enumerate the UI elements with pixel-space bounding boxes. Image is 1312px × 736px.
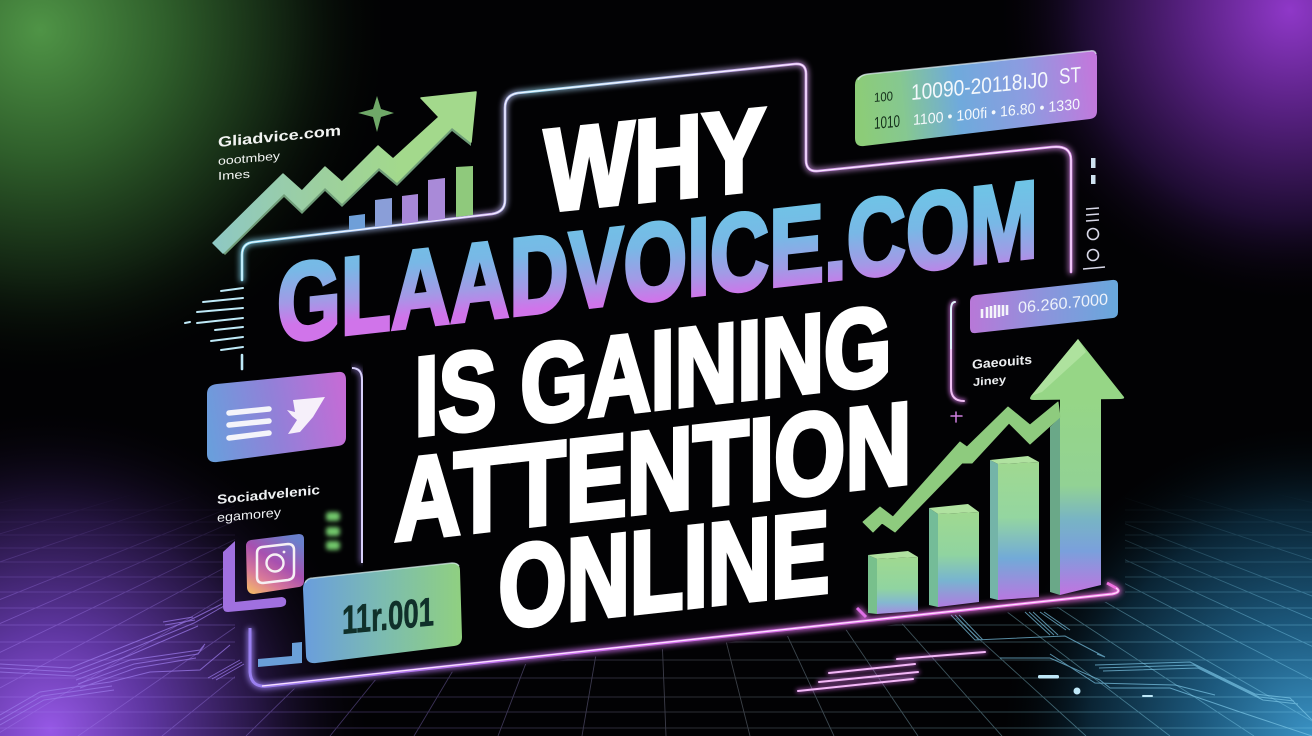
mini bars in pill (982, 305, 1007, 318)
social label: Sociadvelenic (217, 482, 320, 507)
pill value: 06.260.7000 (1018, 290, 1108, 317)
small blue dashes on the floor (1038, 675, 1153, 697)
circuit traces left (0, 604, 244, 725)
right chart label (972, 352, 1032, 389)
banner values: ST (1059, 62, 1081, 89)
pink dashes on the floor (798, 652, 985, 691)
top left label: Gliadvice.com (218, 123, 341, 151)
small bar chart top left (349, 166, 473, 230)
neon bracket right (951, 302, 964, 422)
zigzag trend line (863, 402, 1060, 532)
right chart label: Jiney (973, 374, 1007, 389)
data banner top right (855, 51, 1097, 146)
top left label: oootmbey (218, 151, 280, 168)
bar 1 (868, 551, 918, 614)
circuit traces right (951, 612, 1312, 736)
icon: bird (287, 397, 325, 434)
title line: ATTENTION: ATTENTION (394, 378, 912, 565)
bar 2 (929, 504, 979, 607)
icon: instagram (246, 534, 304, 594)
right chart label: Gaeouits (972, 352, 1032, 372)
neon frame left ticks (185, 288, 243, 369)
top left label (218, 123, 341, 183)
side indicators right (1083, 158, 1105, 269)
neon frame bottom line (250, 583, 1118, 686)
3D bar chart with arrow (863, 339, 1124, 614)
growth arrow bar (1030, 339, 1124, 595)
icon: list lines (229, 409, 269, 438)
top left label: Imes (218, 169, 250, 183)
data pill middle right (970, 280, 1118, 333)
banner row labels (874, 88, 900, 133)
title line: ONLINE: ONLINE (498, 487, 830, 653)
icon: sparkle star (358, 96, 394, 132)
neon frame left inner segment (352, 368, 362, 563)
social label (217, 482, 320, 525)
pill number text: 11r.001 (342, 590, 434, 643)
banner values (911, 62, 1081, 129)
green status dots (326, 512, 340, 550)
blue step mark (258, 642, 302, 667)
title line: IS GAINING: IS GAINING (414, 282, 892, 459)
social label: egamorey (217, 505, 282, 525)
banner row labels: 1010 (874, 112, 900, 133)
number pill (303, 563, 462, 663)
perspective floor grid (0, 503, 1312, 736)
title line: WHY: WHY (544, 84, 766, 236)
icon: bracket (223, 541, 286, 612)
banner values: 10090-20118ıJ0 (911, 67, 1048, 105)
social pill with list and bird icon (207, 372, 346, 462)
bar 3 (990, 456, 1039, 600)
title line: GLAADVOICE.COM: GLAADVOICE.COM (277, 158, 1038, 366)
title (277, 84, 1038, 653)
banner values: 1100 • 100fi • 16.80 • 1330 (913, 96, 1080, 129)
neon frame upper section (242, 64, 1071, 280)
banner row labels: 100 (874, 88, 893, 105)
icon: rising arrow top left (213, 92, 476, 255)
